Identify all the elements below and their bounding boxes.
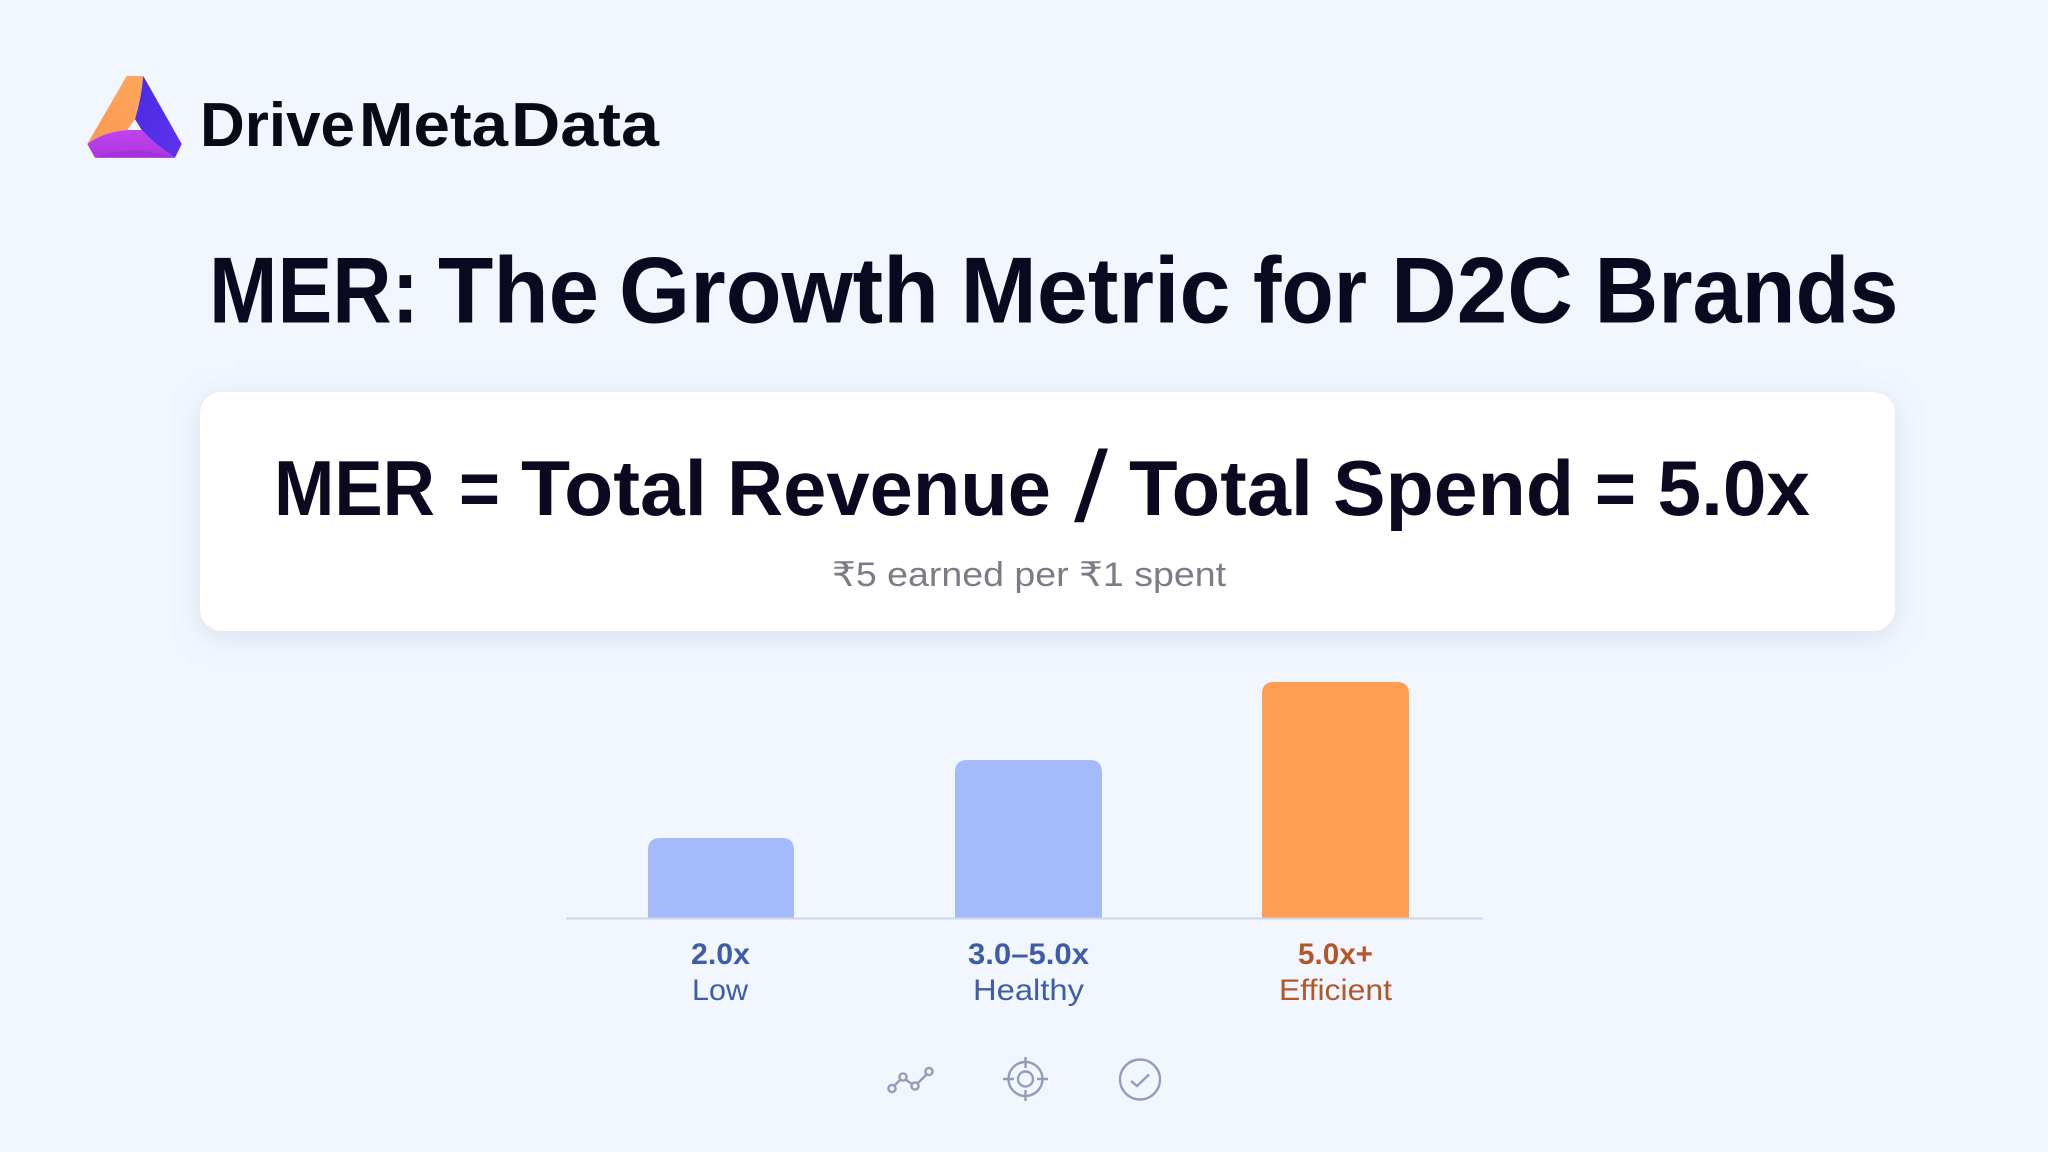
formula text: MER — [274, 444, 435, 532]
panel: formula card — [200, 392, 1895, 631]
title: for — [1253, 238, 1367, 342]
title: D2C — [1391, 238, 1573, 342]
bar: low — [648, 838, 794, 918]
logo: DriveMetaData — [87, 76, 660, 160]
label: 3.0–5.0x healthy — [968, 938, 1089, 1007]
formula text: Total — [521, 444, 707, 532]
icon: tri-colour triangle mark — [87, 76, 182, 158]
wordmark: Drive — [200, 91, 355, 160]
title: MER: — [209, 238, 419, 342]
label: 3.0–5.0x healthy: Healthy — [973, 974, 1084, 1007]
bar chart: MER benchmarks — [566, 682, 1483, 1007]
label: 5.0x+ efficient: 5.0x+ — [1298, 938, 1373, 971]
label: 5.0x+ efficient: Efficient — [1279, 974, 1393, 1007]
formula text — [274, 431, 1810, 543]
icon: line chart — [888, 1068, 933, 1092]
label: 2.0x low: 2.0x — [691, 938, 750, 971]
icon: target — [1003, 1057, 1048, 1101]
formula subtext: ₹5 earned per ₹1 spent — [832, 556, 1227, 594]
bar: healthy — [955, 760, 1102, 918]
formula text: Revenue — [727, 444, 1051, 532]
title: Metric — [960, 238, 1230, 342]
title: Brands — [1594, 238, 1898, 342]
label: 3.0–5.0x healthy: 3.0–5.0x — [968, 938, 1089, 971]
formula text: Spend — [1333, 444, 1574, 532]
formula text: 5.0x — [1658, 444, 1810, 532]
label: 2.0x low — [691, 938, 750, 1007]
bar: efficient — [1262, 682, 1409, 918]
title — [209, 238, 1898, 342]
wordmark: Meta — [359, 91, 509, 160]
icons row — [888, 1057, 1160, 1101]
icon: check circle — [1120, 1060, 1160, 1100]
label: 2.0x low: Low — [692, 974, 748, 1007]
label: 5.0x+ efficient — [1279, 938, 1393, 1007]
wordmark: Data — [511, 91, 660, 160]
formula text: / — [1074, 431, 1108, 543]
formula text: = — [1595, 444, 1636, 532]
wordmark — [200, 91, 660, 160]
title: The — [438, 238, 599, 342]
title: Growth — [619, 238, 939, 342]
formula text: = — [459, 444, 500, 532]
formula text: Total — [1129, 444, 1313, 532]
